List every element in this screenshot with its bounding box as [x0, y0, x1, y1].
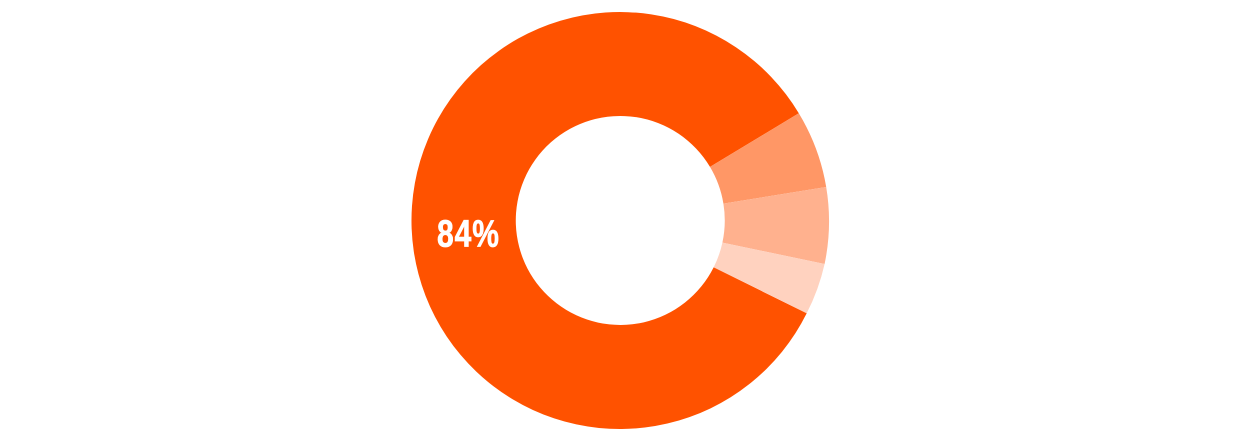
segment: main 84% [411, 12, 807, 429]
label: 84%: 84% [437, 213, 500, 255]
segment: second slice [710, 113, 826, 204]
segment: third slice [722, 187, 829, 264]
segment: fourth slice [714, 243, 825, 313]
